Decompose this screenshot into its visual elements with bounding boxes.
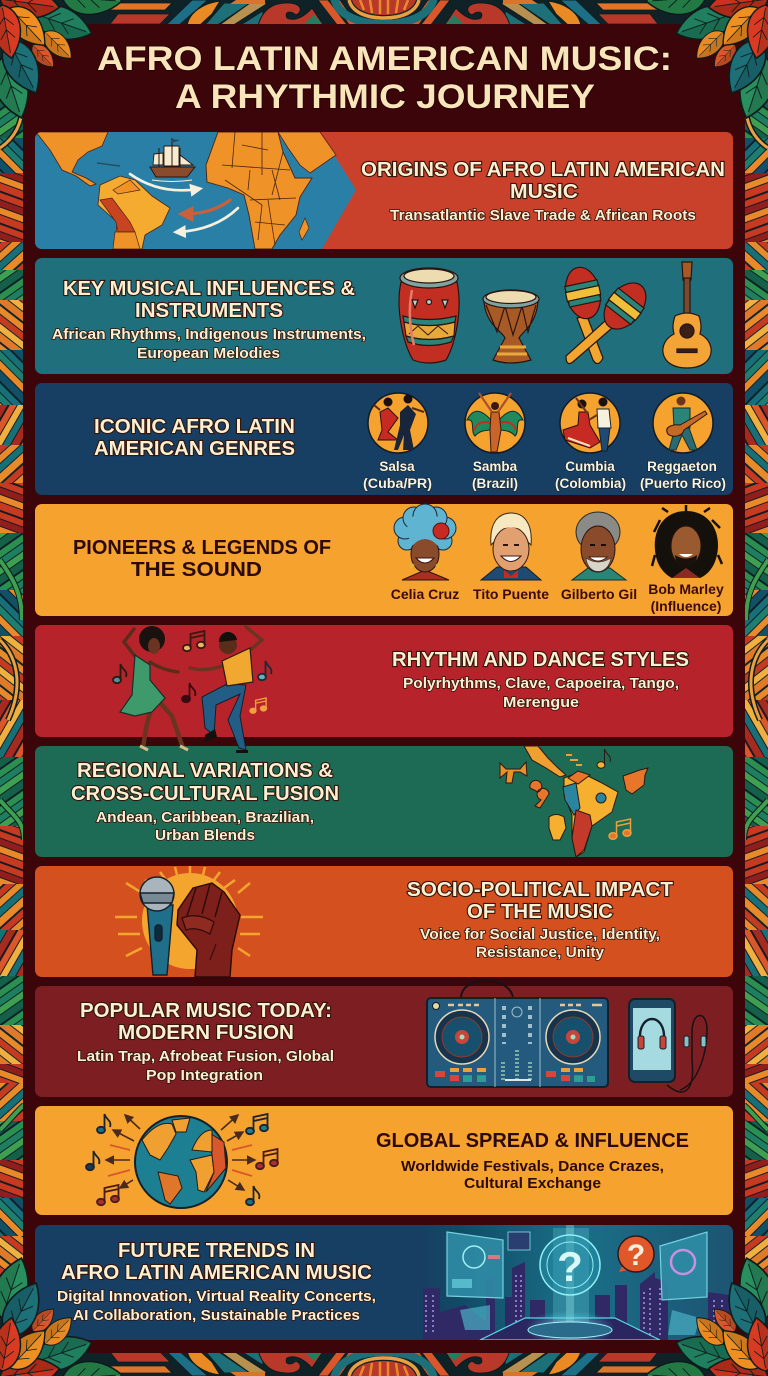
icon: guitar [663, 262, 711, 368]
portrait: Gilberto Gil: Gilberto Gil [561, 586, 637, 602]
subtext: European Melodies [137, 346, 280, 362]
hologram ring [540, 1235, 600, 1295]
speech bubble [618, 1236, 654, 1272]
portrait: Bob Marley [648, 505, 724, 614]
holographic screens [447, 1232, 503, 1298]
buildings [423, 1262, 730, 1340]
portrait: Bob Marley: Bob Marley [648, 581, 724, 597]
genre: samba: (Brazil) [472, 476, 518, 491]
arrows and radiating notes [106, 1115, 255, 1190]
heading: ICONIC AFRO LATIN [94, 416, 295, 438]
icon: smartphone with headphones [629, 999, 707, 1092]
speech bubble: ? [627, 1239, 645, 1272]
subtext: Resistance, Unity [476, 945, 604, 961]
heading: MODERN FUSION [118, 1022, 294, 1044]
icon: fist [549, 814, 566, 840]
icon: music note [597, 749, 610, 768]
heading [94, 416, 295, 460]
portrait: Celia Cruz: Celia Cruz [391, 586, 459, 602]
trade route arrows [130, 174, 238, 232]
panel: socio-political impact [35, 866, 733, 977]
ship [150, 138, 195, 182]
panel: genres [35, 383, 733, 495]
icon: maracas [561, 264, 654, 364]
subtext: Andean, Caribbean, Brazilian, [96, 810, 314, 826]
dancer: man [190, 627, 262, 753]
genre: cumbia: Cumbia [565, 459, 615, 474]
icon: drum [623, 768, 648, 794]
subtext: Cultural Exchange [464, 1175, 601, 1192]
heading [61, 1240, 372, 1284]
genre: salsa: (Cuba/PR) [363, 476, 432, 491]
panel: rhythm and dance [35, 625, 733, 737]
panel: origins [35, 132, 733, 249]
heading [63, 278, 355, 322]
short orange rays [108, 1145, 252, 1176]
icon: trumpet [500, 762, 527, 783]
dancer: woman [120, 626, 188, 750]
portrait: Celia Cruz [391, 504, 459, 602]
icon: globe [135, 1116, 227, 1208]
genre: reggaeton: Reggaeton [647, 459, 717, 474]
subtext: African Rhythms, Indigenous Instruments, [52, 327, 366, 343]
genre: reggaeton: (Puerto Rico) [640, 476, 726, 491]
subtext: Digital Innovation, Virtual Reality Concerts, [57, 1289, 376, 1305]
icon: dancing couple [113, 626, 271, 753]
heading: THE SOUND [131, 559, 262, 581]
genre: salsa: Salsa [379, 459, 415, 474]
heading: SOCIO-POLITICAL IMPACT [407, 879, 673, 901]
icon: maracas [530, 780, 549, 808]
heading: POPULAR MUSIC TODAY: [80, 1000, 332, 1022]
icon: music notes [86, 1114, 278, 1205]
icon: sun rays [115, 866, 263, 969]
genre: samba: Samba [473, 459, 518, 474]
heading [71, 760, 339, 805]
heading: REGIONAL VARIATIONS & [77, 760, 333, 782]
question mark: ? [557, 1243, 583, 1290]
panel: instruments [35, 258, 733, 374]
portrait: Bob Marley: (Influence) [651, 598, 721, 614]
heading: AMERICAN GENRES [94, 438, 295, 460]
title: A RHYTHMIC JOURNEY [175, 78, 595, 116]
heading: RHYTHM AND DANCE STYLES [392, 649, 689, 671]
platform [480, 1318, 660, 1340]
icon: raised fist [177, 883, 240, 977]
heading [407, 879, 673, 923]
subtext [77, 1049, 334, 1084]
subtext [96, 810, 314, 844]
subtext [57, 1289, 376, 1324]
corner leaves [0, 0, 768, 123]
heading: CROSS-CULTURAL FUSION [71, 783, 339, 805]
heading [80, 1000, 332, 1044]
genre: samba [465, 393, 525, 491]
futuristic city illustration [422, 1225, 733, 1346]
subtext [420, 927, 660, 961]
icon: DJ controller [427, 981, 608, 1087]
genre: reggaeton [640, 393, 726, 491]
heading: OF THE MUSIC [467, 901, 613, 923]
heading: ORIGINS OF AFRO LATIN AMERICAN [361, 159, 725, 181]
genre: cumbia [555, 393, 626, 491]
genre: cumbia: (Colombia) [555, 476, 626, 491]
heading [73, 537, 331, 581]
heading: INSTRUMENTS [135, 300, 283, 322]
heading: KEY MUSICAL INFLUENCES & [63, 278, 355, 300]
icon: conga [399, 268, 459, 363]
subtext [401, 1158, 664, 1192]
title [97, 40, 672, 116]
hologram base glow [528, 1312, 612, 1340]
subtext: Polyrhythms, Clave, Capoeira, Tango, [403, 676, 679, 692]
subtext: Urban Blends [155, 828, 255, 844]
heading: GLOBAL SPREAD & INFLUENCE [376, 1130, 689, 1152]
icon: double music note [609, 819, 631, 839]
subtext: Transatlantic Slave Trade & African Roots [390, 208, 696, 224]
panel: global spread [35, 1106, 733, 1215]
bottom corner leaves [0, 1253, 768, 1376]
heading: MUSIC [510, 181, 578, 203]
subtext: Worldwide Festivals, Dance Crazes, [401, 1158, 664, 1175]
icon: djembe [483, 290, 539, 363]
light beam [553, 1228, 589, 1328]
title: AFRO LATIN AMERICAN MUSIC: [97, 40, 672, 78]
panel: pioneers [35, 504, 733, 616]
panel: regional variations [35, 746, 733, 857]
icon: microphone [140, 877, 174, 975]
subtext: Voice for Social Justice, Identity, [420, 927, 660, 943]
heading: AFRO LATIN AMERICAN MUSIC [61, 1262, 372, 1284]
portrait: Tito Puente: Tito Puente [473, 586, 549, 602]
subtext: Pop Integration [146, 1068, 263, 1084]
portrait: Gilberto Gil [561, 512, 637, 602]
heading: PIONEERS & LEGENDS OF [73, 537, 331, 559]
subtext: Latin Trap, Afrobeat Fusion, Global [77, 1049, 334, 1065]
subtext: Merengue [503, 695, 579, 711]
heading: FUTURE TRENDS IN [118, 1240, 315, 1262]
subtext: AI Collaboration, Sustainable Practices [73, 1308, 360, 1324]
subtext [52, 327, 366, 362]
panel: future trends [35, 1225, 733, 1346]
subtext [403, 676, 679, 711]
heading [361, 159, 725, 203]
map of Latin America with instruments [500, 746, 648, 857]
panel: popular music today [35, 981, 733, 1097]
genre: salsa [363, 393, 432, 491]
portrait: Tito Puente [473, 513, 549, 602]
map of the Atlantic [35, 132, 356, 249]
music notes [113, 631, 271, 713]
